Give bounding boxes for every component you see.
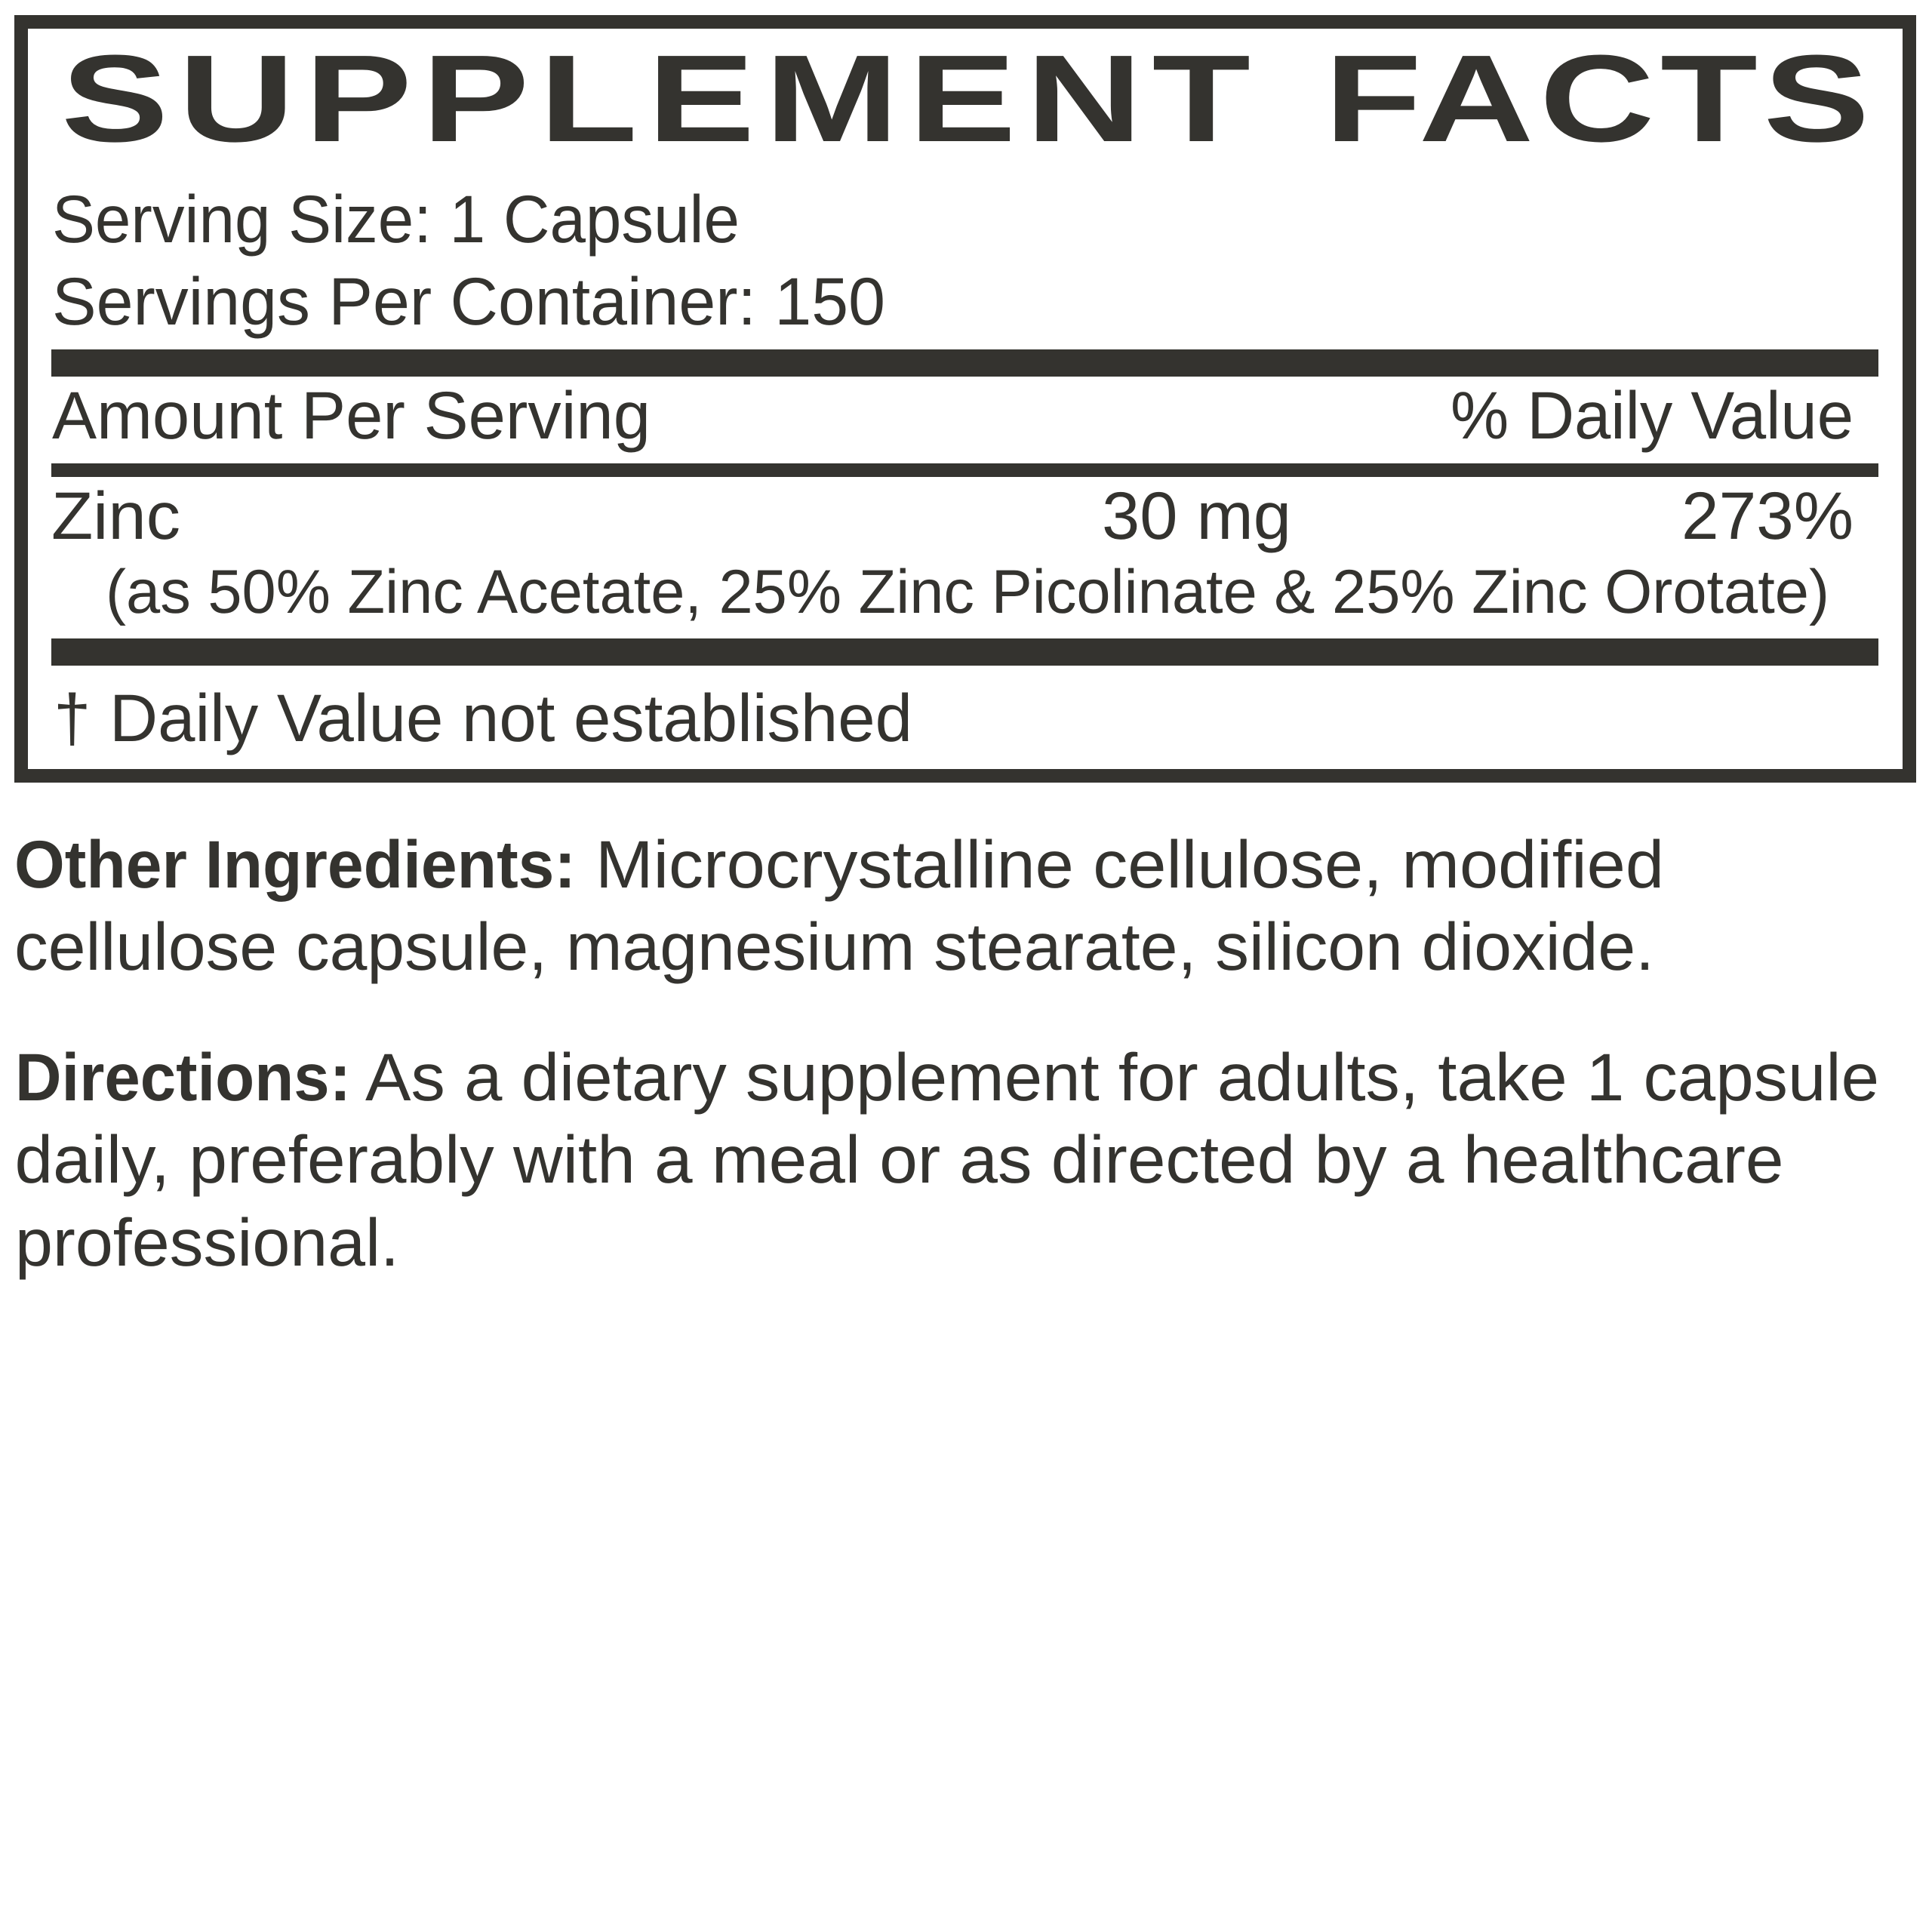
- zinc amount: 30 mg: [1102, 478, 1291, 553]
- title: [61, 29, 1875, 168]
- column header: amount per serving: Amount Per Serving: [52, 377, 651, 453]
- thick rule under servings: [51, 349, 1878, 377]
- other ingredients label: Other Ingredients:: [14, 826, 576, 902]
- text block: directions: [15, 1039, 1879, 1280]
- column header: percent daily value: % Daily Value: [1451, 377, 1854, 453]
- directions first line: As a dietary supplement for adults, take 1 capsule: [365, 1039, 1879, 1115]
- directions third line: professional.: [15, 1204, 399, 1280]
- zinc name: Zinc: [51, 478, 180, 553]
- title word: facts: FACTS: [1324, 29, 1875, 168]
- servings per container: Servings Per Container: 150: [52, 263, 885, 339]
- zinc daily value: 273%: [1681, 478, 1854, 553]
- zinc forms note: (as 50% Zinc Acetate, 25% Zinc Picolinate & 25% Zinc Orotate): [106, 558, 1829, 626]
- row: zinc: [51, 478, 1854, 553]
- title word: supplement: SUPPLEMENT: [61, 29, 1260, 168]
- text block: other ingredients: [14, 826, 1664, 984]
- other ingredients second line: cellulose capsule, magnesium stearate, silicon dioxide.: [14, 909, 1654, 984]
- panel border: [21, 22, 1909, 776]
- directions second line: daily, preferably with a meal or as directed by a healthcare: [15, 1121, 1784, 1197]
- panel: supplement facts: [21, 22, 1909, 776]
- directions label: Directions:: [15, 1039, 351, 1115]
- serving size: Serving Size: 1 Capsule: [52, 181, 740, 257]
- footnote: † Daily Value not established: [54, 680, 912, 755]
- other ingredients first line: Microcrystalline cellulose, modified: [595, 826, 1664, 902]
- thick rule under zinc row: [51, 638, 1878, 666]
- rule under column headers: [51, 463, 1878, 477]
